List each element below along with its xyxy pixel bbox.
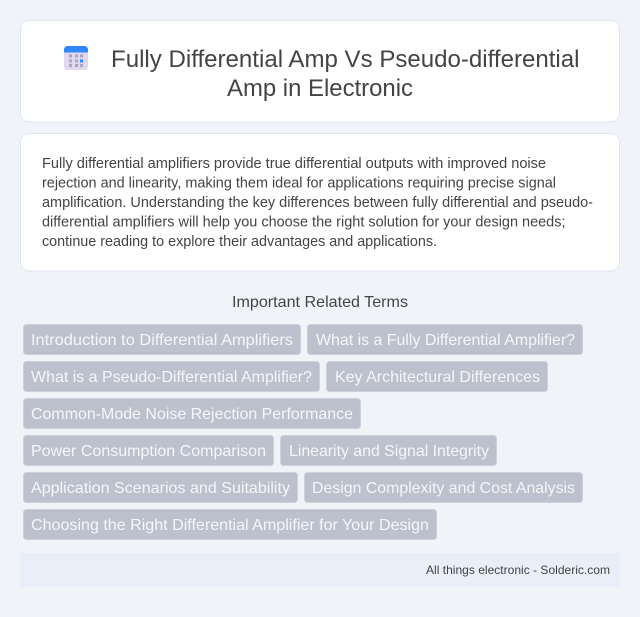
- title: Fully Differential Amp Vs Pseudo-differential: [111, 46, 580, 73]
- tag: [24, 472, 298, 502]
- heading: important related terms: Important Related Terms: [232, 294, 408, 311]
- panel: introduction text: continue reading to explore their advantages and applications.: [42, 234, 437, 250]
- panel: introduction text: amplification. Understanding the key differences between fully differential and pseudo-: [42, 195, 593, 211]
- tag: [24, 324, 300, 354]
- panel: related term tags: [24, 324, 582, 540]
- footer: [20, 553, 620, 587]
- tag: Linearity and Signal Integrity: [289, 443, 489, 460]
- tag: Power Consumption Comparison: [31, 443, 266, 460]
- tag: [24, 362, 320, 392]
- tag: Introduction to Differential Amplifiers: [31, 332, 293, 349]
- title: Amp in Electronic: [227, 75, 413, 102]
- panel: introduction text: [20, 134, 620, 271]
- tag: Key Architectural Differences: [335, 369, 540, 386]
- tag: What is a Fully Differential Amplifier?: [316, 332, 575, 349]
- tag: [24, 510, 436, 540]
- panel: introduction text: differential amplifiers will help you choose the right solution for your design needs;: [42, 214, 566, 230]
- tag: [308, 324, 582, 354]
- panel: introduction text: Fully differential amplifiers provide true differential outputs with improved noise: [42, 156, 546, 172]
- tag: [24, 436, 274, 466]
- tag: Application Scenarios and Suitability: [31, 480, 290, 497]
- tag: Choosing the Right Differential Amplifier for Your Design: [31, 517, 429, 534]
- tag: [24, 398, 360, 428]
- tag: [304, 472, 582, 502]
- tag: [326, 362, 548, 392]
- tag: What is a Pseudo-Differential Amplifier?: [31, 369, 312, 386]
- tag: Design Complexity and Cost Analysis: [312, 480, 575, 497]
- title: [111, 46, 580, 102]
- footer: All things electronic - Solderic.com: [426, 563, 610, 577]
- tag: Common-Mode Noise Rejection Performance: [31, 406, 353, 423]
- icon: calendar grid: [64, 46, 88, 70]
- panel: introduction text: rejection and linearity, making them ideal for applications requiring precise signal: [42, 176, 556, 192]
- header panel: [20, 20, 620, 122]
- tag: [280, 436, 496, 466]
